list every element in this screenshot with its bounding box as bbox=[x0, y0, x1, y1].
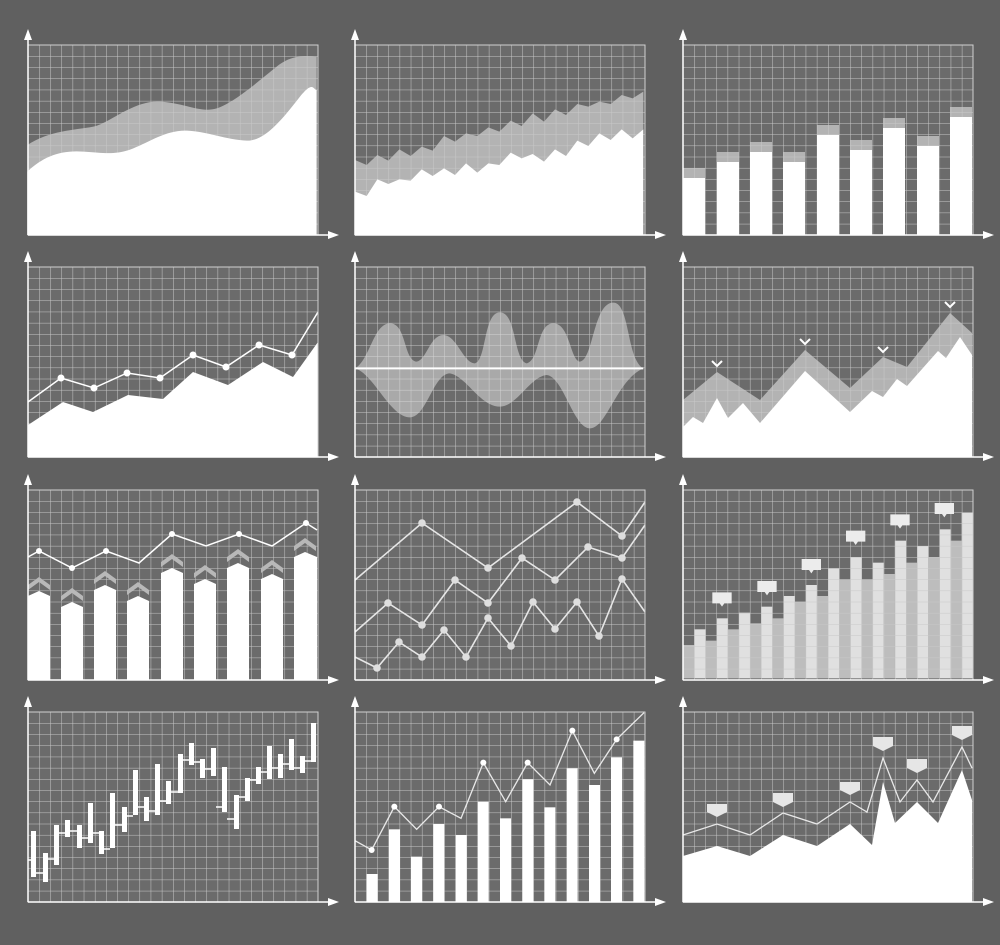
chart 8: three line series bbox=[351, 474, 666, 684]
chart 12: area with callout line bbox=[679, 696, 994, 906]
chart 1: wave area bbox=[24, 29, 339, 239]
chart 10: candlesticks bbox=[24, 696, 339, 906]
chart 3: bars with caps bbox=[679, 29, 994, 239]
chart 2: zigzag area bbox=[351, 29, 666, 239]
chart 7: bars with chevrons and line bbox=[24, 474, 339, 684]
chart 5: symmetric waves bbox=[351, 251, 666, 461]
chart 4: area with dotted line bbox=[24, 251, 339, 461]
chart 9: dense bars with callouts bbox=[679, 474, 994, 684]
chart 6: mountains with markers bbox=[679, 251, 994, 461]
chart 11: bars with dotted line bbox=[351, 696, 666, 906]
